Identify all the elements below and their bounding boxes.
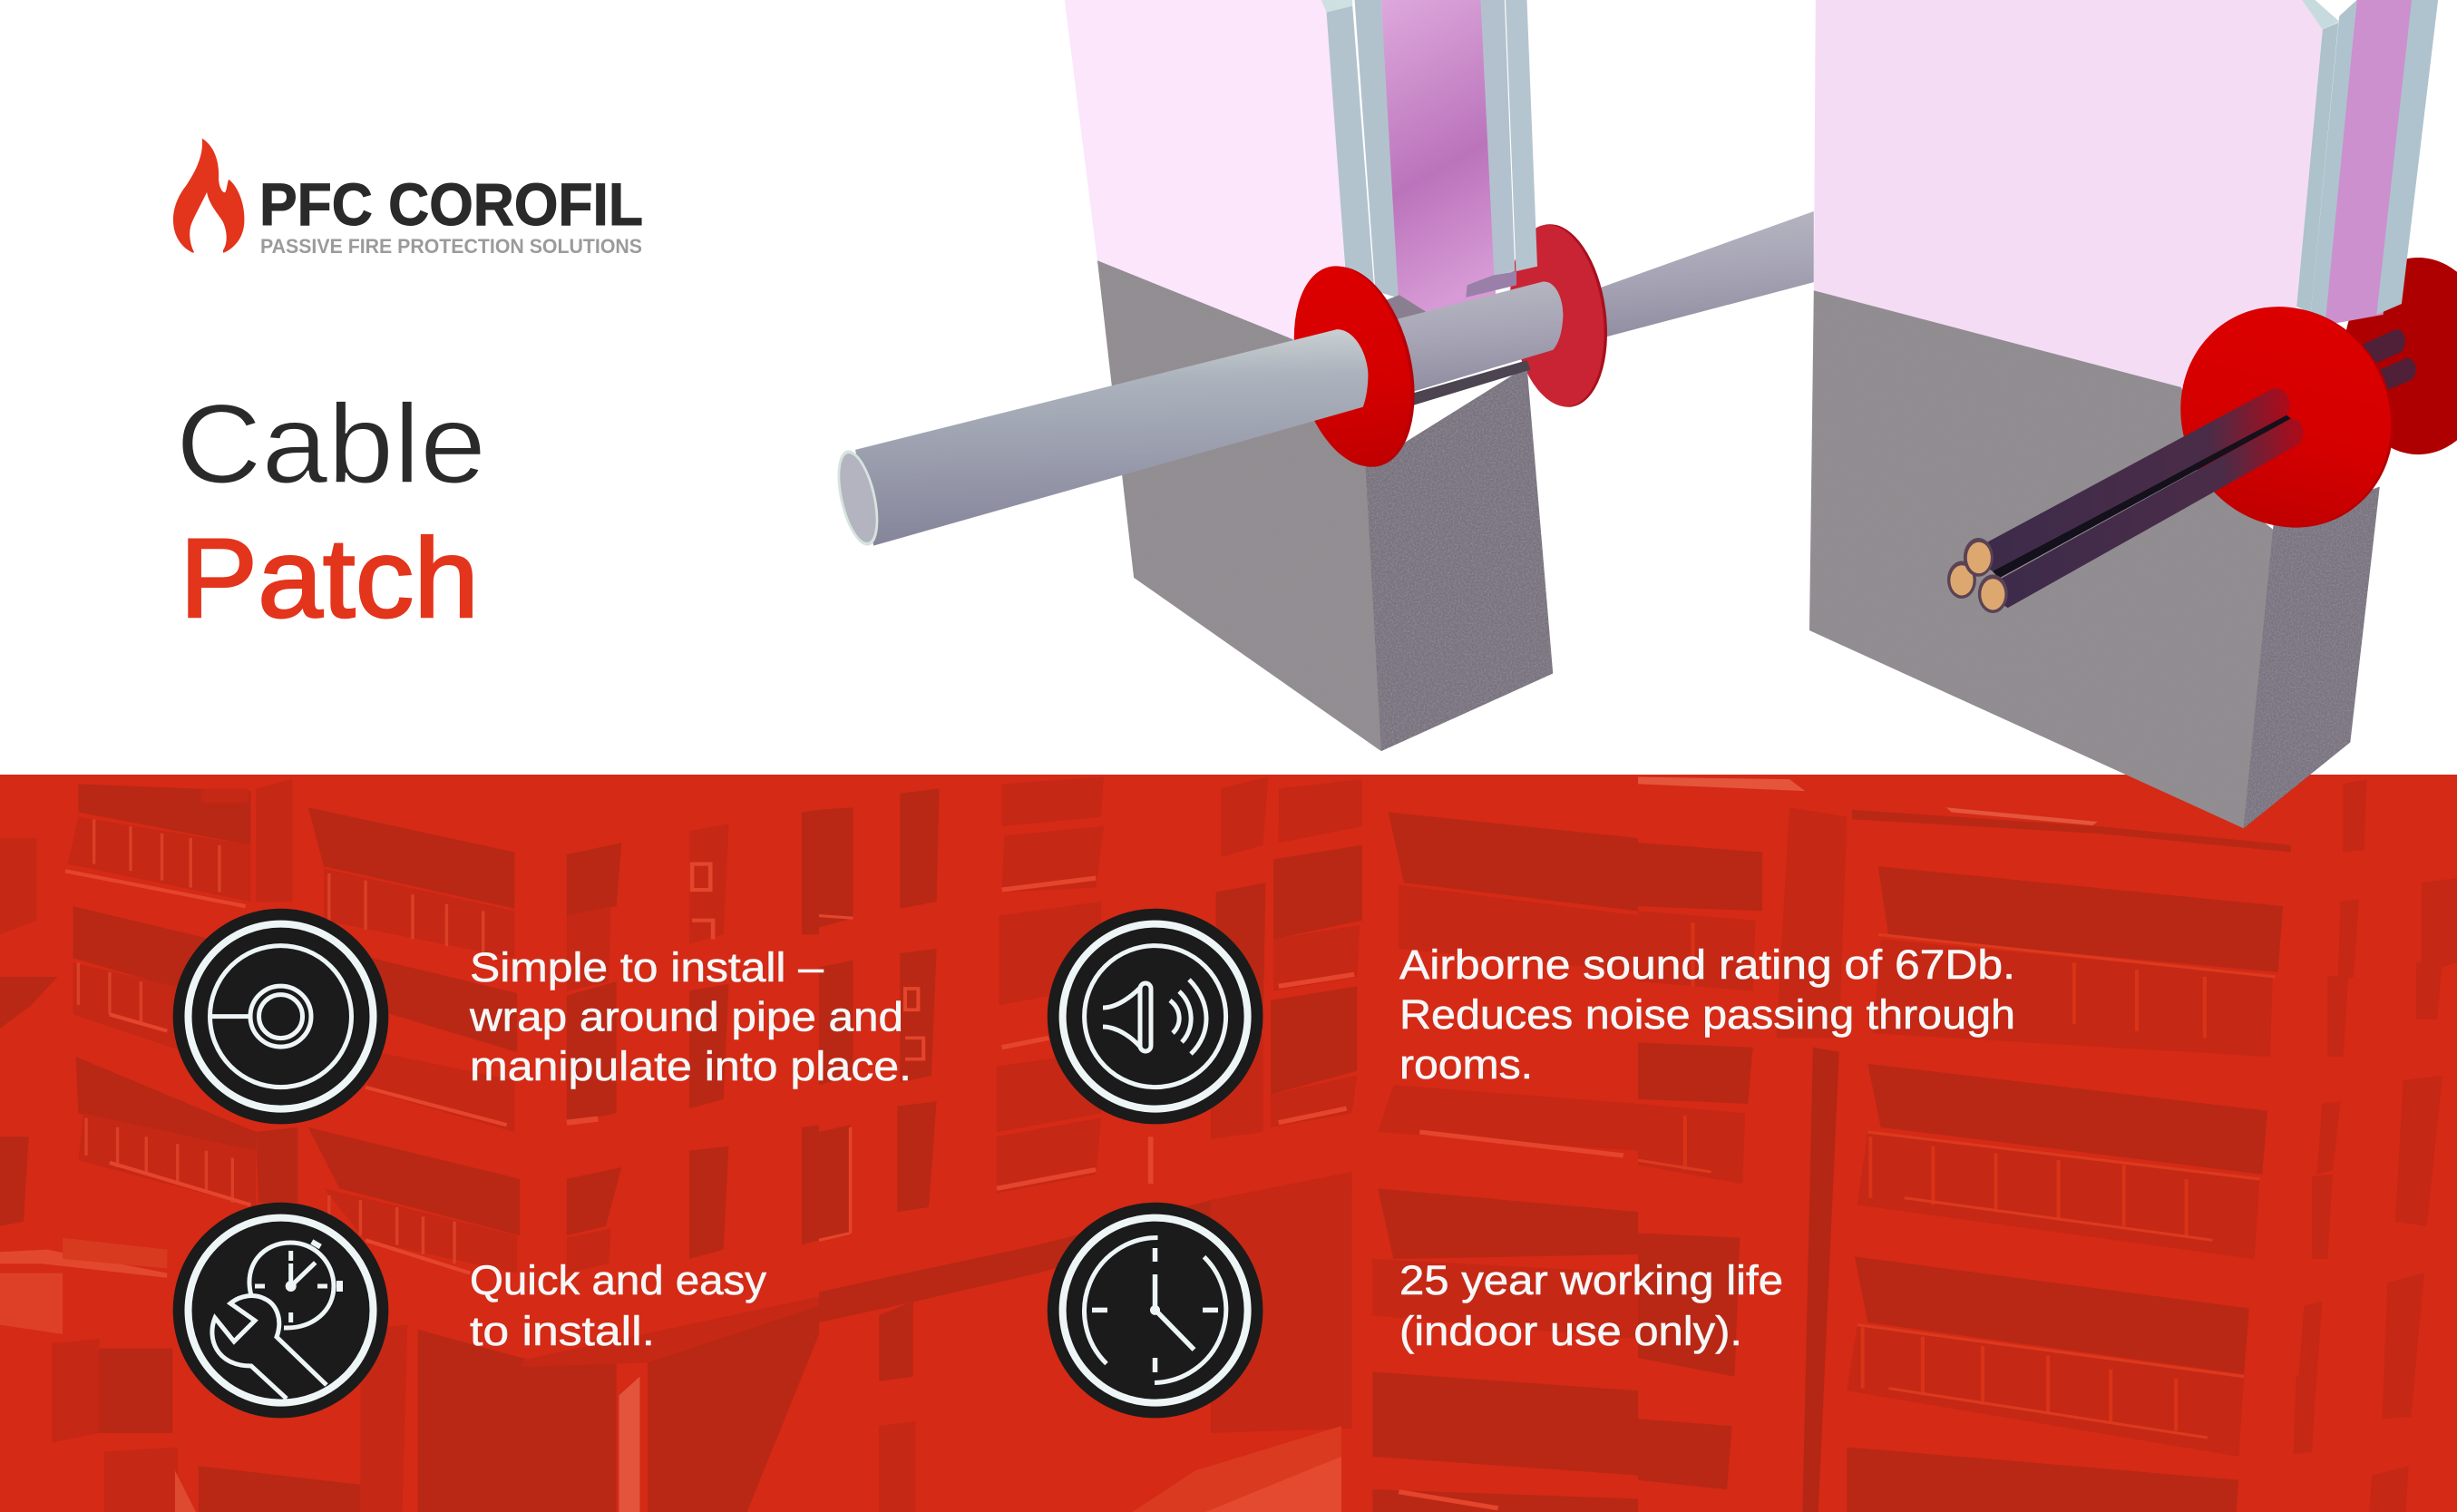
illustration: pipe through wall: [830, 0, 1814, 751]
far pipe section: [1587, 211, 1814, 339]
concrete base front: [1809, 290, 2274, 828]
panel: red building background band: [0, 775, 2457, 1512]
icon: pipe wrap: [173, 909, 388, 1124]
opening shadows: [1384, 271, 1531, 405]
plasterboard face: [1814, 0, 2323, 387]
front fire collar: [2164, 283, 2411, 551]
icon: flame: [173, 139, 244, 253]
concrete base front: [1097, 260, 1381, 751]
text: simple to install: wrap around pipe and: [469, 994, 903, 1040]
text: quick and easy: [470, 1257, 767, 1354]
icon: speaker: [1048, 909, 1263, 1124]
plasterboard face: [1065, 0, 1352, 344]
pipe front section: [855, 329, 1368, 546]
logo tagline: PASSIVE FIRE PROTECTION SOLUTIONS: [260, 235, 642, 258]
text: airborne sound rating: Reduces noise passing through: [1399, 991, 2015, 1038]
back cables: [2357, 329, 2416, 390]
text: simple to install: manipulate into place.: [470, 1043, 912, 1089]
pipe mid section: [1391, 281, 1563, 392]
front fire collar: [1276, 256, 1432, 477]
text: airborne sound rating: [1399, 941, 2015, 1088]
text: quick and easy: to install.: [470, 1308, 655, 1354]
wall cavity: [1381, 0, 1496, 325]
board edges: [1321, 0, 1537, 298]
wall cavity: [2324, 0, 2418, 326]
text: working life: (indoor use only).: [1399, 1308, 1742, 1354]
illustration: cables through wall: [1809, 0, 2457, 828]
board edges: [2296, 0, 2438, 323]
logo wordmark: PFC COROFIL: [259, 171, 643, 238]
pipe open end: [830, 447, 886, 549]
back fire collar: [1500, 219, 1617, 413]
text: working life: 25 year working life: [1399, 1257, 1783, 1303]
text: quick and easy: Quick and easy: [470, 1257, 767, 1303]
back fire collar: [2344, 258, 2457, 454]
title line: Patch: Patch: [180, 516, 479, 641]
text: airborne sound rating: Airborne sound rating of 67Db.: [1399, 941, 2015, 988]
text: working life: [1399, 1257, 1783, 1354]
text: simple to install: Simple to install –: [470, 944, 824, 990]
icon: clock: [1048, 1203, 1263, 1418]
text: airborne sound rating: rooms.: [1399, 1041, 1533, 1088]
icon: stopwatch and wrench: [173, 1203, 388, 1418]
concrete base side: [1366, 366, 1553, 751]
title line: Cable: Cable: [176, 382, 486, 507]
cables: [1947, 388, 2304, 613]
logo: [173, 139, 643, 258]
concrete base side: [2244, 487, 2380, 828]
title: [176, 382, 486, 641]
text: simple to install: [469, 944, 912, 1089]
